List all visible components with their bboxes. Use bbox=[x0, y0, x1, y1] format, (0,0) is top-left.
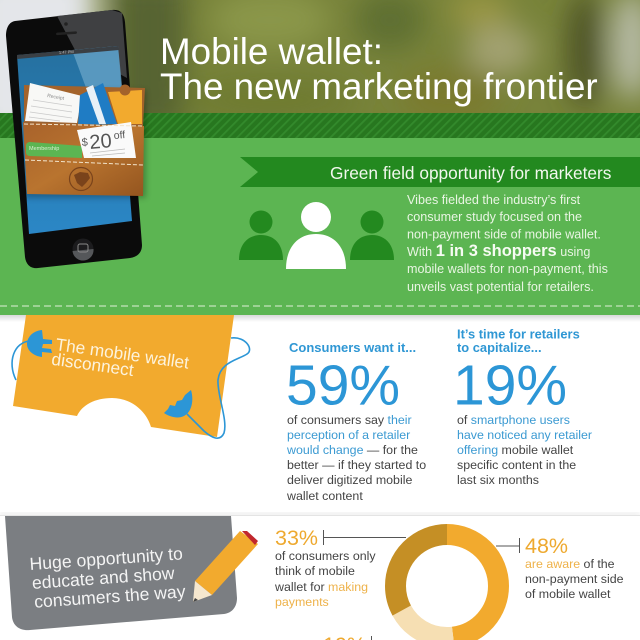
intro paragraph: consumer study focused on the bbox=[407, 210, 582, 224]
column: consumers want it: Consumers want it... bbox=[289, 340, 416, 355]
callout: 33%: of consumers only bbox=[275, 549, 376, 563]
phone body bbox=[6, 10, 142, 268]
column: time for retailers to capitalize bbox=[453, 326, 592, 487]
intro paragraph: non-payment side of mobile wallet. bbox=[407, 228, 601, 242]
description: last six months bbox=[457, 473, 539, 487]
description: perception of a retailer bbox=[287, 428, 410, 442]
description: deliver digitized mobile bbox=[287, 473, 412, 487]
description: of smartphone users bbox=[457, 413, 570, 427]
membership card bbox=[26, 142, 82, 158]
callout: 33%: wallet for making bbox=[274, 580, 368, 594]
description bbox=[286, 413, 426, 503]
section shadow under green panel bbox=[0, 315, 640, 322]
blue card bbox=[78, 83, 117, 125]
hatched green strip bbox=[0, 113, 640, 138]
illustration: phone with wallet bbox=[6, 10, 146, 268]
receipt bbox=[25, 83, 82, 123]
icon: group of people bbox=[239, 202, 394, 269]
intro paragraph: mobile wallets for non-payment, this bbox=[407, 262, 608, 276]
status bar time: 1:47 PM bbox=[59, 49, 74, 55]
heading: huge opportunity: educate and show bbox=[31, 563, 175, 593]
description: would change — for the bbox=[286, 443, 418, 457]
heading: huge opportunity: Huge opportunity to bbox=[29, 543, 184, 574]
header photo background bbox=[0, 0, 640, 113]
wallet shadow bbox=[25, 90, 146, 198]
description: offering mobile wallet bbox=[457, 443, 574, 457]
callout: 48%: non-payment side bbox=[525, 572, 624, 586]
phone speaker and camera bbox=[56, 22, 77, 35]
callout: 33%: 33% bbox=[275, 526, 318, 550]
description bbox=[457, 413, 592, 487]
title: The new marketing frontier bbox=[160, 66, 598, 107]
icon: unplugged cable bbox=[12, 330, 250, 438]
intro paragraph: With 1 in 3 shoppers using bbox=[407, 242, 590, 260]
wallet emblem bbox=[70, 168, 92, 190]
icon: pencil bbox=[193, 531, 258, 602]
heading: the mobile wallet disconnect bbox=[50, 334, 191, 388]
coupon: 20 bbox=[89, 130, 113, 154]
yellow ticket bbox=[108, 84, 142, 124]
intro paragraph: Vibes fielded the industry’s first bbox=[407, 193, 581, 207]
callout: 48%: are aware of the bbox=[525, 557, 615, 571]
panel: the mobile wallet disconnect bbox=[12, 315, 250, 438]
column: time for retailers to capitalize: It’s time for retailers bbox=[457, 326, 580, 342]
column: time for retailers to capitalize: to capitalize... bbox=[457, 340, 542, 355]
coupon: $ bbox=[81, 137, 88, 149]
description: of consumers say their bbox=[287, 413, 412, 427]
phone glare bbox=[57, 10, 127, 78]
callout: 48%: of mobile wallet bbox=[525, 587, 611, 601]
description: wallet content bbox=[286, 489, 363, 503]
phone screen bbox=[17, 46, 132, 234]
heading: the mobile wallet disconnect: The mobile wallet bbox=[54, 334, 191, 373]
column: consumers want it bbox=[286, 340, 426, 503]
description: specific content in the bbox=[457, 458, 576, 472]
membership card: Membership bbox=[29, 146, 59, 152]
wallet back bbox=[24, 85, 145, 126]
callout: 48%: 48% bbox=[525, 534, 568, 558]
heading: huge opportunity bbox=[29, 543, 186, 612]
section divider shadow bbox=[0, 513, 640, 516]
callout: 48% bbox=[496, 534, 624, 601]
callout: 33%: think of mobile bbox=[275, 564, 355, 578]
heading: the mobile wallet disconnect: disconnect bbox=[50, 349, 135, 380]
description: have noticed any retailer bbox=[457, 428, 592, 442]
ribbon heading bbox=[240, 157, 640, 187]
receipt: Receipt bbox=[47, 93, 65, 102]
intro paragraph: unveils vast potential for retailers. bbox=[407, 280, 594, 294]
panel: huge opportunity bbox=[5, 516, 258, 630]
description: better — if they started to bbox=[287, 458, 426, 472]
callout: 33%: payments bbox=[275, 595, 329, 609]
title bbox=[160, 31, 598, 107]
coupon: off bbox=[113, 129, 126, 142]
title: Mobile wallet: bbox=[160, 31, 383, 72]
stat: 19%: 19% bbox=[453, 354, 567, 418]
panel: green field opportunity bbox=[0, 138, 640, 315]
intro paragraph bbox=[407, 193, 608, 294]
heading: huge opportunity: consumers the way bbox=[34, 581, 186, 612]
stat: 59%: 59% bbox=[286, 354, 400, 418]
donut chart bbox=[396, 534, 498, 638]
ribbon heading: Green field opportunity for marketers bbox=[330, 163, 612, 183]
home button bbox=[72, 238, 94, 261]
coupon bbox=[77, 122, 136, 158]
wallet front bbox=[23, 122, 144, 196]
wallet stitching bbox=[24, 124, 143, 165]
callout: 33% bbox=[274, 526, 406, 609]
